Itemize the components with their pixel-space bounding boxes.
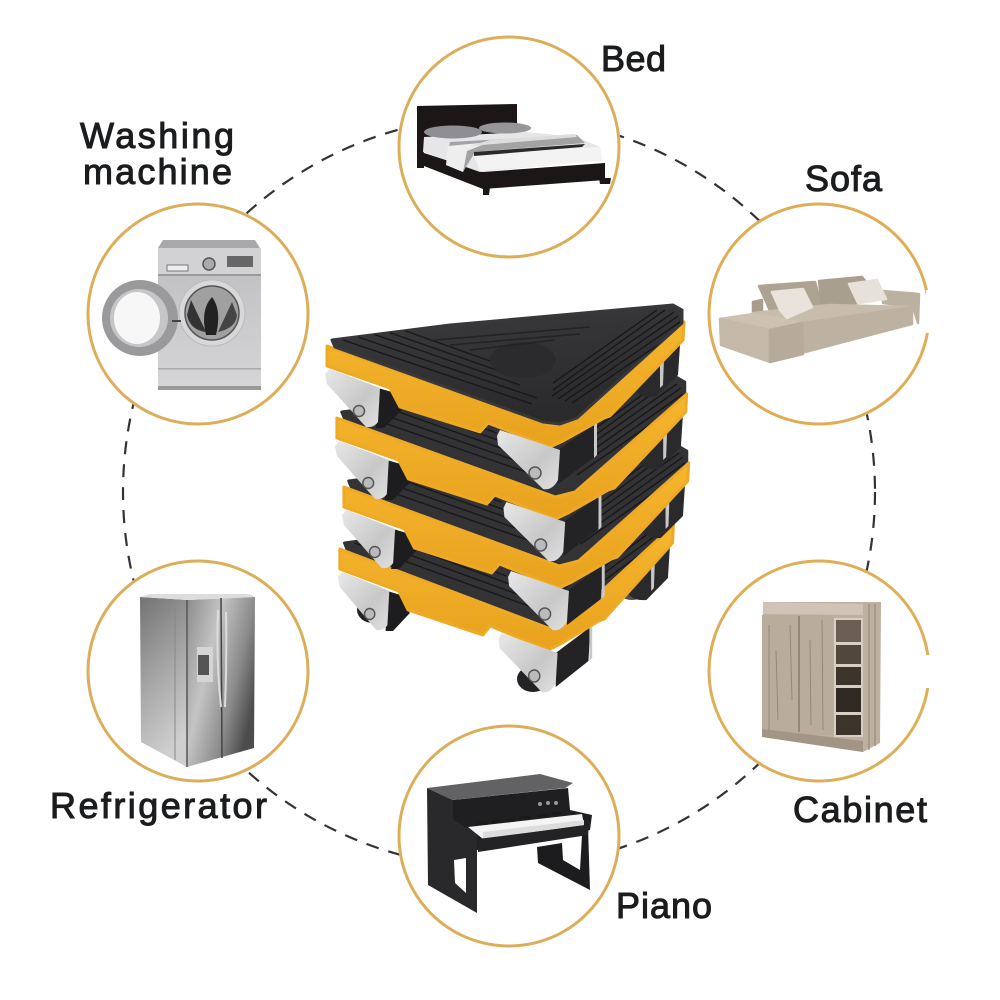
dashed connecting ring — [123, 116, 875, 868]
label: cabinet: Cabinet — [793, 789, 927, 830]
mask: right clipping edge — [926, 290, 934, 333]
label: bed: Bed — [601, 38, 666, 79]
label: washing machine — [80, 115, 234, 192]
label: washing machine: Washing — [80, 115, 234, 156]
icon: cabinet — [762, 602, 881, 752]
mask: right clipping edge — [926, 655, 934, 688]
icon: piano — [427, 774, 592, 913]
label: piano: Piano — [616, 885, 712, 926]
panel: refrigerator circle — [88, 561, 308, 781]
icon: sofa — [720, 277, 919, 362]
mover layer 4 — [338, 508, 674, 692]
product: stacked triangular furniture movers — [325, 305, 689, 692]
panel: washing machine circle — [88, 204, 308, 424]
panel: cabinet circle — [709, 561, 934, 781]
icon: refrigerator — [140, 594, 255, 767]
icon: bed — [417, 104, 611, 195]
bottom wheels — [357, 580, 646, 692]
icon: washing machine — [102, 240, 261, 390]
label: washing machine: machine — [83, 151, 232, 192]
label: sofa: Sofa — [805, 158, 883, 199]
mover layer 1 (top) — [325, 305, 684, 489]
mover layer 3 — [342, 446, 689, 630]
panel: sofa circle — [709, 204, 934, 424]
panel: piano circle — [399, 726, 619, 946]
panel: bed circle — [399, 37, 619, 257]
label: refrigerator: Refrigerator — [50, 785, 267, 826]
mover layer 2 — [335, 377, 687, 561]
